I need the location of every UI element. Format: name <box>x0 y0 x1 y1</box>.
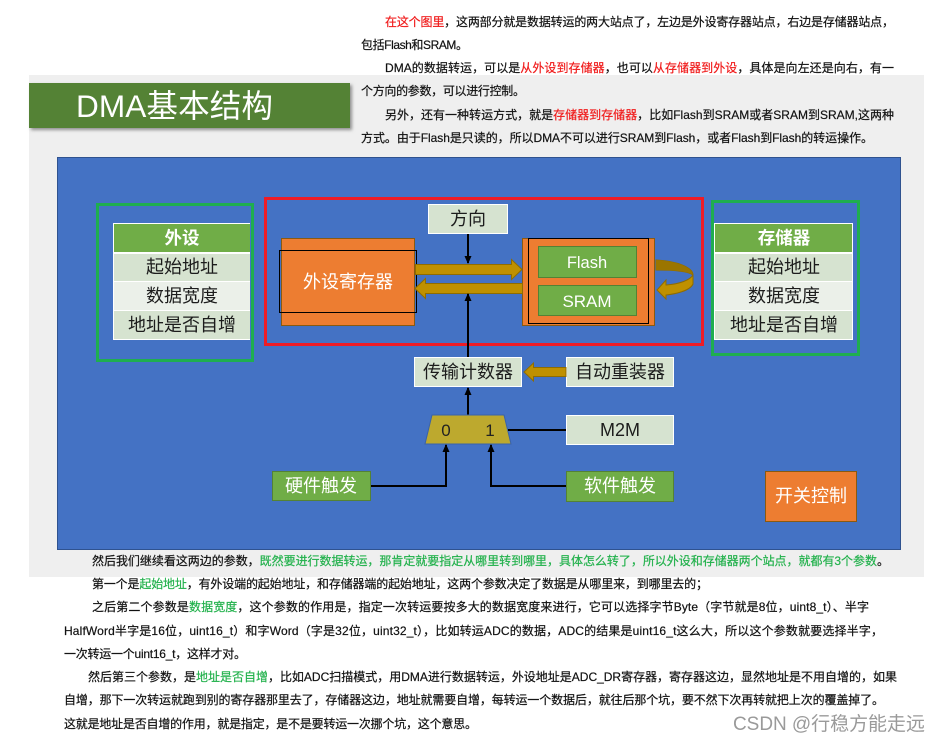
multiplexer: 0 <box>441 421 451 440</box>
arrow: memory to peripheral <box>415 278 522 298</box>
panel: red transfer frame <box>266 198 702 344</box>
multiplexer: 1 <box>485 421 495 440</box>
peripheral register block <box>280 238 416 326</box>
M2M box: M2M <box>600 420 640 440</box>
intro text block: 方式。由于Flash是只读的，所以DMA不可以进行SRAM到Flash，或者Flash到Flash的转运操作。 <box>361 130 873 145</box>
explanation text block: 第一个是起始地址，有外设端的起始地址，和存储器端的起始地址，这两个参数决定了数据是从哪里来，到哪里去的； <box>92 576 708 591</box>
explanation text block: 一次转运一个uint16_t，这样才对。 <box>64 646 246 661</box>
intro text block: 另外，还有一种转运方式，就是存储器到存储器，比如Flash到SRAM或者SRAM到SRAM,这两种 <box>385 107 894 122</box>
peripheral register block: 外设寄存器 <box>303 272 393 292</box>
explanation text block <box>64 553 897 731</box>
memory block: SRAM <box>562 292 612 311</box>
panel: peripheral station: 数据宽度 <box>146 286 218 306</box>
panel: DMA block diagram <box>58 158 900 550</box>
transfer counter box <box>414 357 522 387</box>
panel: peripheral station <box>98 204 252 360</box>
arrow: memory to memory loop <box>656 260 693 299</box>
panel: memory station <box>712 202 858 354</box>
panel: memory station: 起始地址 <box>748 257 820 277</box>
panel: peripheral station: 地址是否自增 <box>128 315 236 335</box>
intro text block: 包括Flash和SRAM。 <box>361 37 468 52</box>
panel: peripheral station: 起始地址 <box>146 257 218 277</box>
memory block <box>522 238 654 326</box>
arrow: peripheral to memory <box>416 260 522 280</box>
intro text block: 个方向的参数，可以进行控制。 <box>361 83 525 98</box>
panel: peripheral station: 外设 <box>164 228 200 248</box>
arrow: reload <box>524 363 566 381</box>
panel: memory station: 数据宽度 <box>748 286 820 306</box>
arrow: hardware trigger <box>371 445 446 486</box>
switch control box <box>766 472 856 522</box>
explanation text block: 自增，那下一次转运就跑到别的寄存器那里去了，存储器这边，地址就需要自增，每转运一个数据后，就往后那个坑，要不然下次再转就把上次的覆盖掉了。 <box>64 692 884 707</box>
arrow: mux to counter <box>467 388 469 415</box>
explanation text block: HalfWord半字是16位，uint16_t）和字Word（字是32位，uint32_t），比如转运ADC的数据，ADC的结果是uint16_t这么大，所以这个参数就要选择半字， <box>64 623 883 638</box>
arrow: direction down <box>467 234 469 263</box>
intro text block <box>361 14 894 145</box>
direction box: 方向 <box>450 209 486 229</box>
line: M2M to mux <box>508 429 566 431</box>
title banner: DMA基本结构 <box>76 88 273 124</box>
explanation text block: 然后我们继续看这两边的参数，既然要进行数据转运，那肯定就要指定从哪里转到哪里，具体怎么转了，所以外设和存储器两个站点，就都有3个参数。 <box>92 553 889 568</box>
direction box <box>428 204 508 234</box>
hardware trigger box: 硬件触发 <box>285 476 357 496</box>
intro text block: 在这个图里，这两部分就是数据转运的两大站点了，左边是外设寄存器站点，右边是存储器站点， <box>385 14 894 29</box>
arrow: software trigger <box>491 445 566 486</box>
software trigger box <box>566 472 674 502</box>
M2M box <box>566 415 674 445</box>
explanation text block: 然后第三个参数，是地址是否自增，比如ADC扫描模式，用DMA进行数据转运，外设地址是ADC_DR寄存器，寄存器这边，显然地址是不用自增的，如果 <box>88 669 897 684</box>
gray slide background <box>29 75 924 577</box>
hardware trigger box <box>272 472 370 500</box>
software trigger box: 软件触发 <box>584 476 656 496</box>
switch control box: 开关控制 <box>775 486 847 506</box>
explanation text block: 这就是地址是否自增的作用，就是指定，是不是要转运一次挪个坑，这个意思。 <box>64 716 477 731</box>
panel: memory station: 地址是否自增 <box>730 315 838 335</box>
memory block: Flash <box>567 254 607 272</box>
transfer counter box: 传输计数器 <box>423 362 513 382</box>
multiplexer <box>425 415 511 444</box>
watermark: CSDN @行稳方能走远 <box>733 713 925 735</box>
panel: memory station: 存储器 <box>758 228 811 248</box>
explanation text block: 之后第二个参数是数据宽度，这个参数的作用是，指定一次转运要按多大的数据宽度来进行，它可以选择字节Byte（字节就是8位，uint8_t）、半字 <box>92 599 869 614</box>
auto reloader box: 自动重装器 <box>575 362 665 382</box>
title banner <box>29 83 352 130</box>
auto reloader box <box>566 357 674 387</box>
intro text block: DMA的数据转运，可以是从外设到存储器，也可以从存储器到外设，具体是向左还是向右，有一 <box>385 60 894 75</box>
arrow: counter up <box>467 294 469 357</box>
